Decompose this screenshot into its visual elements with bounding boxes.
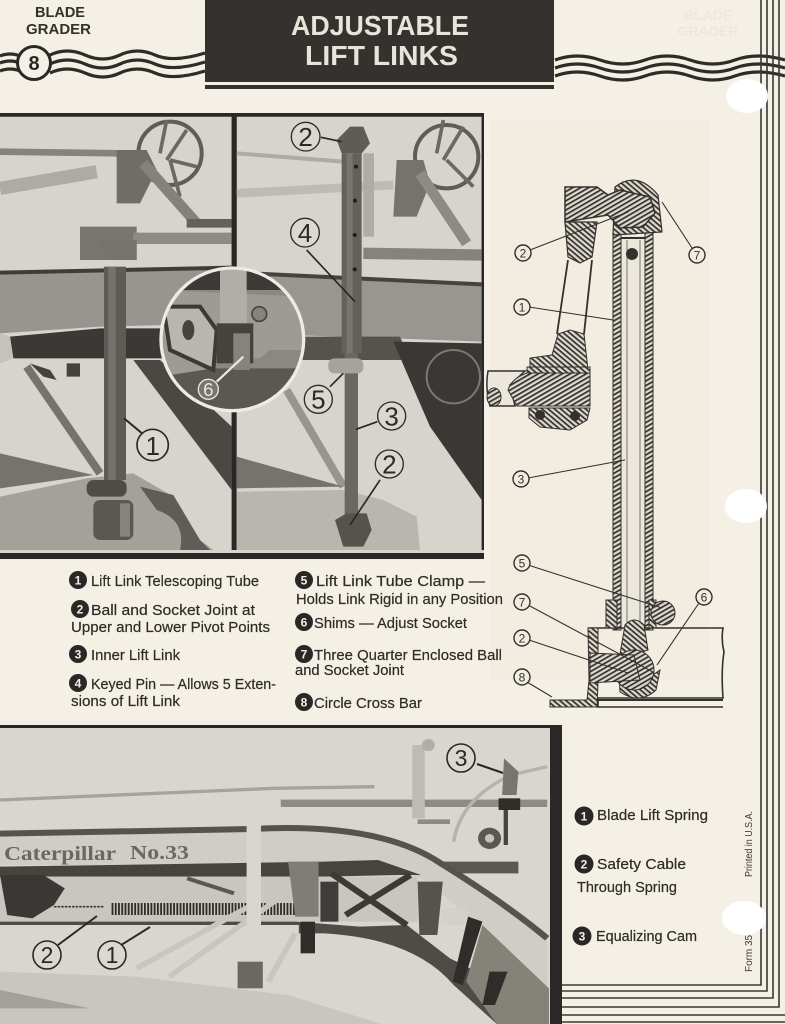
legend item 2 <box>71 600 270 636</box>
spring item 3 <box>572 926 697 946</box>
page number badge <box>18 46 50 80</box>
diagram: numbered callouts: 7 <box>694 248 701 262</box>
diagram: leader lines <box>527 202 699 697</box>
legend item 7: and Socket Joint <box>295 663 404 679</box>
diagram: arm and clamp casting <box>487 260 592 430</box>
label: callout 3 <box>447 744 475 772</box>
parts legend: spring section <box>572 806 708 946</box>
spring item 2: Through Spring <box>577 880 677 896</box>
legend item 1: Lift Link Telescoping Tube <box>91 574 259 590</box>
legend item 2: Ball and Socket Joint at <box>91 603 255 619</box>
legend item 4: sions of Lift Link <box>71 694 181 710</box>
legend item 7: 7 <box>301 648 308 662</box>
diagram: numbered callouts: 6 <box>701 590 708 604</box>
inset detail circle <box>160 267 304 417</box>
spring item 2 <box>574 854 686 896</box>
label: callout 4: 4 <box>298 218 312 248</box>
label: callout 3: 3 <box>384 401 399 431</box>
label: callout 6: 6 <box>203 379 214 400</box>
title block: LIFT LINKS <box>305 40 458 71</box>
label: callout 2 upper <box>291 122 320 152</box>
diagram: upper ball and socket <box>565 180 662 263</box>
photo: grader circle frame <box>0 729 549 1024</box>
label: callout 6 <box>198 379 218 400</box>
photo panel: blade lift spring <box>0 725 562 1024</box>
wavy rule: left <box>0 51 205 77</box>
legend item 4 <box>69 674 276 710</box>
diagram: numbered callouts <box>513 245 712 685</box>
label: callout 2 <box>33 941 61 969</box>
photo lettering: Caterpillar <box>4 843 116 865</box>
diagram: numbered callouts: 8 <box>519 670 526 684</box>
label: callout 2: 2 <box>41 942 53 968</box>
parts legend: column one <box>69 571 276 710</box>
legend item 8 <box>295 693 422 712</box>
legend item 6: Shims — Adjust Socket <box>314 616 467 632</box>
spring item 3: 3 <box>579 930 586 944</box>
legend item 8: Circle Cross Bar <box>314 696 422 712</box>
legend item 4: Keyed Pin — Allows 5 Exten- <box>91 677 276 693</box>
diagram: numbered callouts: 7 <box>519 596 526 610</box>
show-through ghost heading <box>678 7 738 39</box>
title block <box>205 0 554 89</box>
page number badge: 8 <box>28 53 40 75</box>
diagram: numbered callouts: 2 <box>520 246 527 260</box>
label: callout 3 <box>378 401 406 431</box>
diagram: numbered callouts: 2 <box>519 632 526 646</box>
label: callout 3: 3 <box>455 745 467 771</box>
legend item 2: 2 <box>77 602 84 616</box>
label: callout 5: 5 <box>311 385 326 415</box>
punch hole: bottom <box>722 901 766 935</box>
photo: left telescoping link <box>0 117 232 550</box>
photo panel: lift links <box>0 113 484 559</box>
label: callout 2 lower: 2 <box>382 449 397 479</box>
legend item 5 <box>295 571 503 608</box>
spring item 3: Equalizing Cam <box>596 929 697 945</box>
legend item 3 <box>69 645 181 664</box>
wavy rule: right <box>555 56 785 80</box>
title block: ADJUSTABLE <box>291 10 469 41</box>
punch hole: top <box>726 79 768 113</box>
diagram: lower ball and socket with cross bar <box>550 600 724 707</box>
spring item 2: Safety Cable <box>597 857 686 873</box>
photo lettering <box>4 842 189 865</box>
label: callout 2 lower <box>375 449 403 479</box>
arrows and callouts <box>33 744 503 969</box>
section label: Blade Grader <box>26 4 91 38</box>
spring item 2: 2 <box>581 858 588 872</box>
spring item 1 <box>574 806 708 826</box>
spring item 1: Blade Lift Spring <box>597 808 708 824</box>
spring item 1: 1 <box>581 810 588 824</box>
section label: Blade Grader: BLADE <box>35 4 85 21</box>
label: callout 5 <box>304 385 332 415</box>
show-through ghost heading: BLADE <box>684 7 732 23</box>
photo lettering: No.33 <box>130 842 189 864</box>
label: callout 2 upper: 2 <box>298 122 313 152</box>
diagram: telescoping tube <box>613 232 653 630</box>
vertical print note: Printed in U.S.A. <box>744 811 755 877</box>
legend item 5: 5 <box>301 574 308 588</box>
diagram: numbered callouts: 5 <box>519 556 526 570</box>
legend item 2: Upper and Lower Pivot Points <box>71 620 270 636</box>
show-through ghost heading: GRADER <box>678 23 738 39</box>
diagram: numbered callouts: 3 <box>518 472 525 486</box>
page border lines <box>562 0 785 1022</box>
legend item 1: 1 <box>75 574 82 588</box>
section label: Blade Grader: GRADER <box>26 21 91 38</box>
legend item 8: 8 <box>301 696 308 710</box>
legend item 5: Holds Link Rigid in any Position <box>296 592 503 608</box>
diagram: numbered callouts: 1 <box>519 300 526 314</box>
photo: right keyed link <box>237 117 482 550</box>
legend item 4: 4 <box>75 676 82 690</box>
cross-section diagram of lift link <box>487 180 724 707</box>
legend item 7: Three Quarter Enclosed Ball <box>314 648 502 664</box>
vertical form number: Form 35 <box>744 935 755 972</box>
label: callout 1: 1 <box>106 942 118 968</box>
label: callout 1: 1 <box>145 431 160 461</box>
legend item 7 <box>295 645 502 679</box>
label: callout 1 <box>98 941 126 969</box>
legend item 3: 3 <box>75 648 82 662</box>
punch hole: middle <box>725 489 767 523</box>
legend item 6: 6 <box>301 616 308 630</box>
label: callout 1 <box>137 429 168 461</box>
legend item 5: Lift Link Tube Clamp — <box>316 574 486 590</box>
label: callout 4 <box>291 218 319 248</box>
parts legend: column two <box>295 571 503 712</box>
legend item 3: Inner Lift Link <box>91 648 181 664</box>
